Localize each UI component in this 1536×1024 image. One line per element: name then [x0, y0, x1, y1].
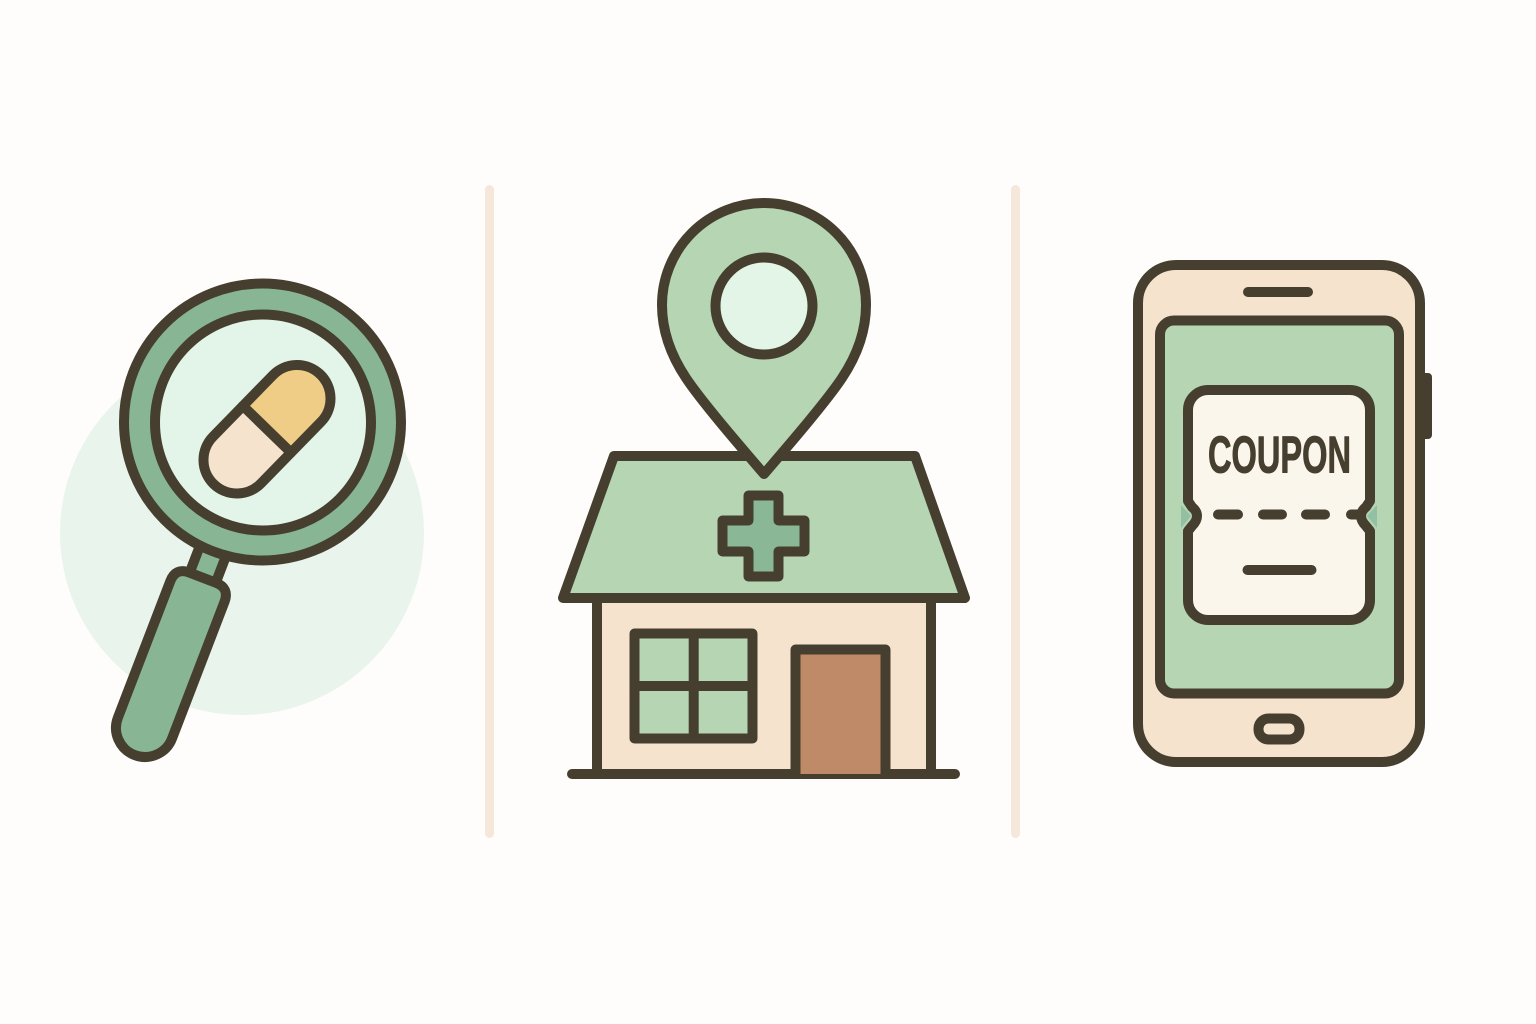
home button: [1258, 718, 1300, 740]
window horizontal bar: [634, 681, 752, 691]
phone body: [1138, 265, 1420, 762]
magnifier handle: [108, 567, 230, 765]
window vertical bar: [689, 634, 699, 738]
pill cream half: [203, 406, 291, 494]
speaker: [1248, 287, 1308, 297]
house walls: [597, 598, 931, 774]
icon: pharmacy house with location pin: [563, 203, 965, 774]
icon: smartphone with coupon: [1138, 265, 1430, 762]
roof: [563, 456, 965, 598]
pill divider: [243, 406, 291, 453]
magnifier lens: [155, 314, 371, 530]
screen: [1160, 320, 1399, 694]
coupon text: COUPON: [1208, 427, 1351, 485]
divider right: [1011, 185, 1020, 838]
coupon notch left: [1181, 505, 1191, 528]
magnifier outer ring: [124, 284, 401, 560]
location pin: [662, 203, 866, 474]
window frame: [634, 634, 752, 738]
magnifier neck: [189, 538, 229, 584]
window: [634, 634, 752, 738]
side button: [1423, 375, 1430, 437]
coupon bottom line: [1248, 565, 1312, 575]
coupon dashed tear line: [1218, 510, 1358, 520]
pin centre circle: [716, 258, 812, 354]
background circle: [60, 351, 424, 715]
divider left: [485, 185, 494, 838]
coupon notch right: [1367, 505, 1377, 528]
ground line: [572, 769, 955, 779]
medical cross: [722, 496, 804, 576]
pill orange half: [243, 365, 331, 453]
pill capsule: [203, 365, 331, 494]
door: [796, 650, 886, 774]
pill outline: [203, 365, 331, 494]
icon: magnifying glass over pill: [60, 284, 424, 765]
coupon ticket: [1188, 390, 1370, 620]
